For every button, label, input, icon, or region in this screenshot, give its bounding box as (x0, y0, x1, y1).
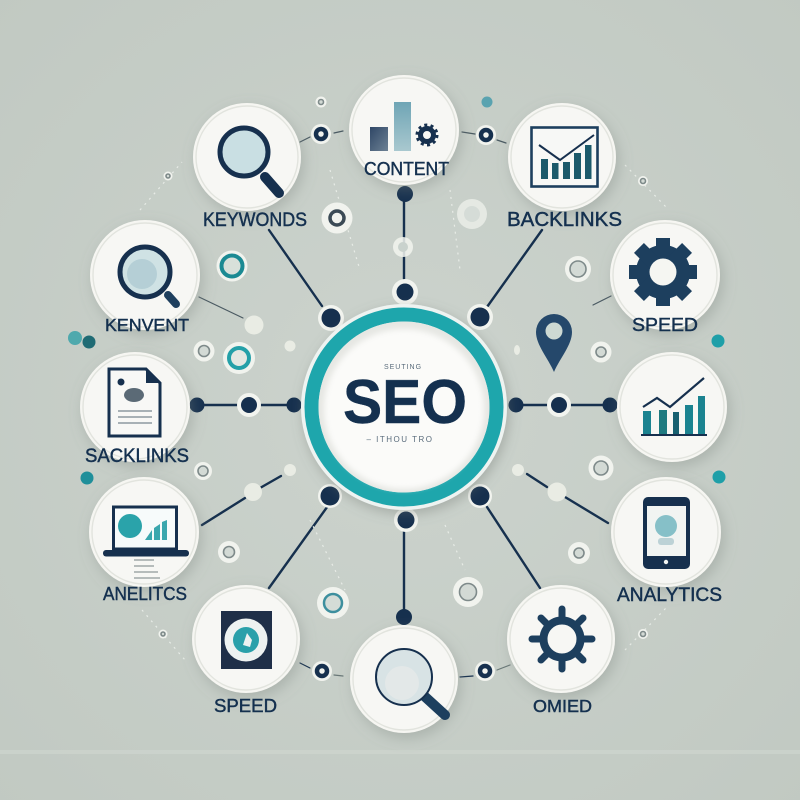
icon: dial (221, 611, 272, 669)
hub title: SEO (343, 368, 467, 437)
icon: framed bar chart (532, 128, 598, 186)
icon: tablet (643, 497, 690, 569)
label: speed: SPEED (632, 315, 698, 335)
icon: magnifier (220, 128, 279, 193)
hub small bottom caption: – ITHOU TRO (366, 435, 434, 444)
dotted decorative arcs (140, 162, 667, 660)
panel: backlinks (507, 103, 622, 231)
label: content: CONTENT (364, 159, 449, 179)
icon: location pin (536, 314, 572, 372)
icon: thin gear (532, 609, 592, 669)
label: omied: OMIED (533, 696, 592, 716)
panel: speed gear (610, 220, 720, 335)
panel: analytics laptop (89, 477, 199, 604)
connector lines (197, 131, 611, 677)
icon: bars and gear (370, 102, 437, 151)
panel: omied (507, 585, 615, 716)
panel: chart (617, 352, 727, 462)
icon: document (109, 369, 160, 436)
central SEO hub (301, 304, 507, 510)
small rings and dots (68, 96, 726, 681)
icon: rising chart (641, 378, 707, 435)
label: backlinks: BACKLINKS (507, 209, 622, 231)
icon: magnifier (120, 247, 176, 304)
label: keywords: KEYWONDS (203, 209, 307, 231)
panel: content (349, 75, 459, 185)
label: speed: SPEED (214, 696, 277, 716)
label: kenvent: KENVENT (105, 315, 189, 335)
label: analytics right: ANALYTICS (617, 585, 722, 606)
hub small top caption: SEUTING (384, 364, 422, 371)
icon: laptop (103, 507, 189, 578)
panel: analytics tablet (611, 477, 722, 606)
panel: search (350, 625, 458, 733)
panel: speed dial (192, 585, 300, 716)
icon: magnifier (376, 649, 445, 715)
panel: keywords (193, 103, 307, 231)
label: sacklinks: SACKLINKS (85, 446, 189, 467)
label: analytics left: ANELITCS (103, 584, 187, 604)
panel: sacklinks (80, 352, 190, 467)
connector nodes (190, 186, 618, 625)
panel: kenvent (90, 220, 200, 335)
icon: gear (629, 238, 697, 306)
